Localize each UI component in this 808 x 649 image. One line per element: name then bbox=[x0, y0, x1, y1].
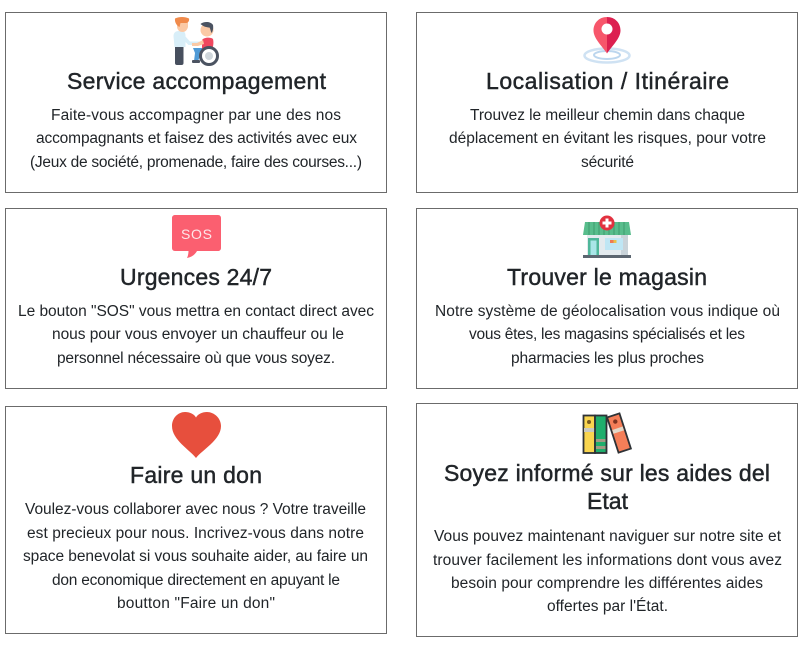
text block: space benevolat si vous souhaite aider, au faire un bbox=[23, 548, 368, 565]
heading: Etat bbox=[587, 488, 629, 514]
text block: don economique directement en apuyant le bbox=[52, 572, 340, 589]
text block: pharmacies les plus proches bbox=[511, 350, 704, 367]
text block bbox=[18, 303, 374, 367]
text block: accompagnants et faisez des activités avec eux bbox=[36, 130, 357, 147]
text block: Trouvez le meilleur chemin dans chaque bbox=[470, 107, 745, 124]
heading: Trouver le magasin bbox=[507, 264, 707, 290]
heading: Soyez informé sur les aides del bbox=[444, 460, 770, 486]
text block: est precieux pour nous. Incrivez-vous dans notre bbox=[27, 525, 364, 542]
text block: déplacement en évitant les risques, pour votre bbox=[449, 130, 766, 147]
heading: Localisation / Itinéraire bbox=[486, 68, 729, 94]
panel: trouver le magasin bbox=[416, 208, 798, 388]
text block: besoin pour comprendre les différentes aides bbox=[451, 575, 763, 592]
text block: vous êtes, les magasins spécialisés et les bbox=[469, 326, 745, 343]
icon: books bbox=[584, 413, 631, 453]
panel: faire un don bbox=[6, 406, 386, 634]
icon: SOS speech bubble: SOS bbox=[181, 226, 212, 242]
text block: Notre système de géolocalisation vous indique où bbox=[435, 303, 780, 320]
heading: Urgences 24/7 bbox=[120, 264, 272, 290]
heading bbox=[444, 460, 770, 514]
icon: heart bbox=[172, 412, 221, 458]
text block: Vous pouvez maintenant naviguer sur notre site et bbox=[434, 528, 782, 545]
text block: sécurité bbox=[581, 154, 634, 171]
text block: (Jeux de société, promenade, faire des courses...) bbox=[30, 154, 362, 171]
text block bbox=[435, 303, 780, 367]
icon: helper and wheelchair user bbox=[174, 17, 218, 65]
text block: Le bouton "SOS" vous mettra en contact direct avec bbox=[18, 303, 374, 320]
text block: trouver facilement les informations dont vous avez bbox=[433, 552, 782, 569]
heading: Service accompagement bbox=[67, 68, 327, 94]
text block: boutton "Faire un don" bbox=[117, 595, 275, 612]
icon: SOS speech bubble bbox=[172, 215, 221, 258]
panel: service accompagement bbox=[6, 12, 386, 192]
text block bbox=[433, 528, 782, 615]
text block: Voulez-vous collaborer avec nous ? Votre traveille bbox=[25, 501, 366, 518]
text block: nous pour vous envoyer un chauffeur ou le bbox=[52, 326, 344, 343]
text block bbox=[23, 501, 368, 612]
heading: Faire un don bbox=[130, 462, 262, 488]
text block: offertes par l'État. bbox=[547, 598, 668, 615]
panel: localisation / itinéraire bbox=[416, 12, 798, 192]
text block: Faite-vous accompagner par une des nos bbox=[51, 107, 341, 124]
text block bbox=[30, 107, 362, 171]
icon: map pin bbox=[584, 17, 630, 62]
text block bbox=[449, 107, 766, 171]
panel: soyez informé bbox=[416, 404, 798, 636]
panel: urgences 24/7 bbox=[6, 208, 386, 388]
text block: personnel nécessaire où que vous soyez. bbox=[57, 350, 335, 367]
icon: pharmacy shop bbox=[583, 216, 631, 258]
